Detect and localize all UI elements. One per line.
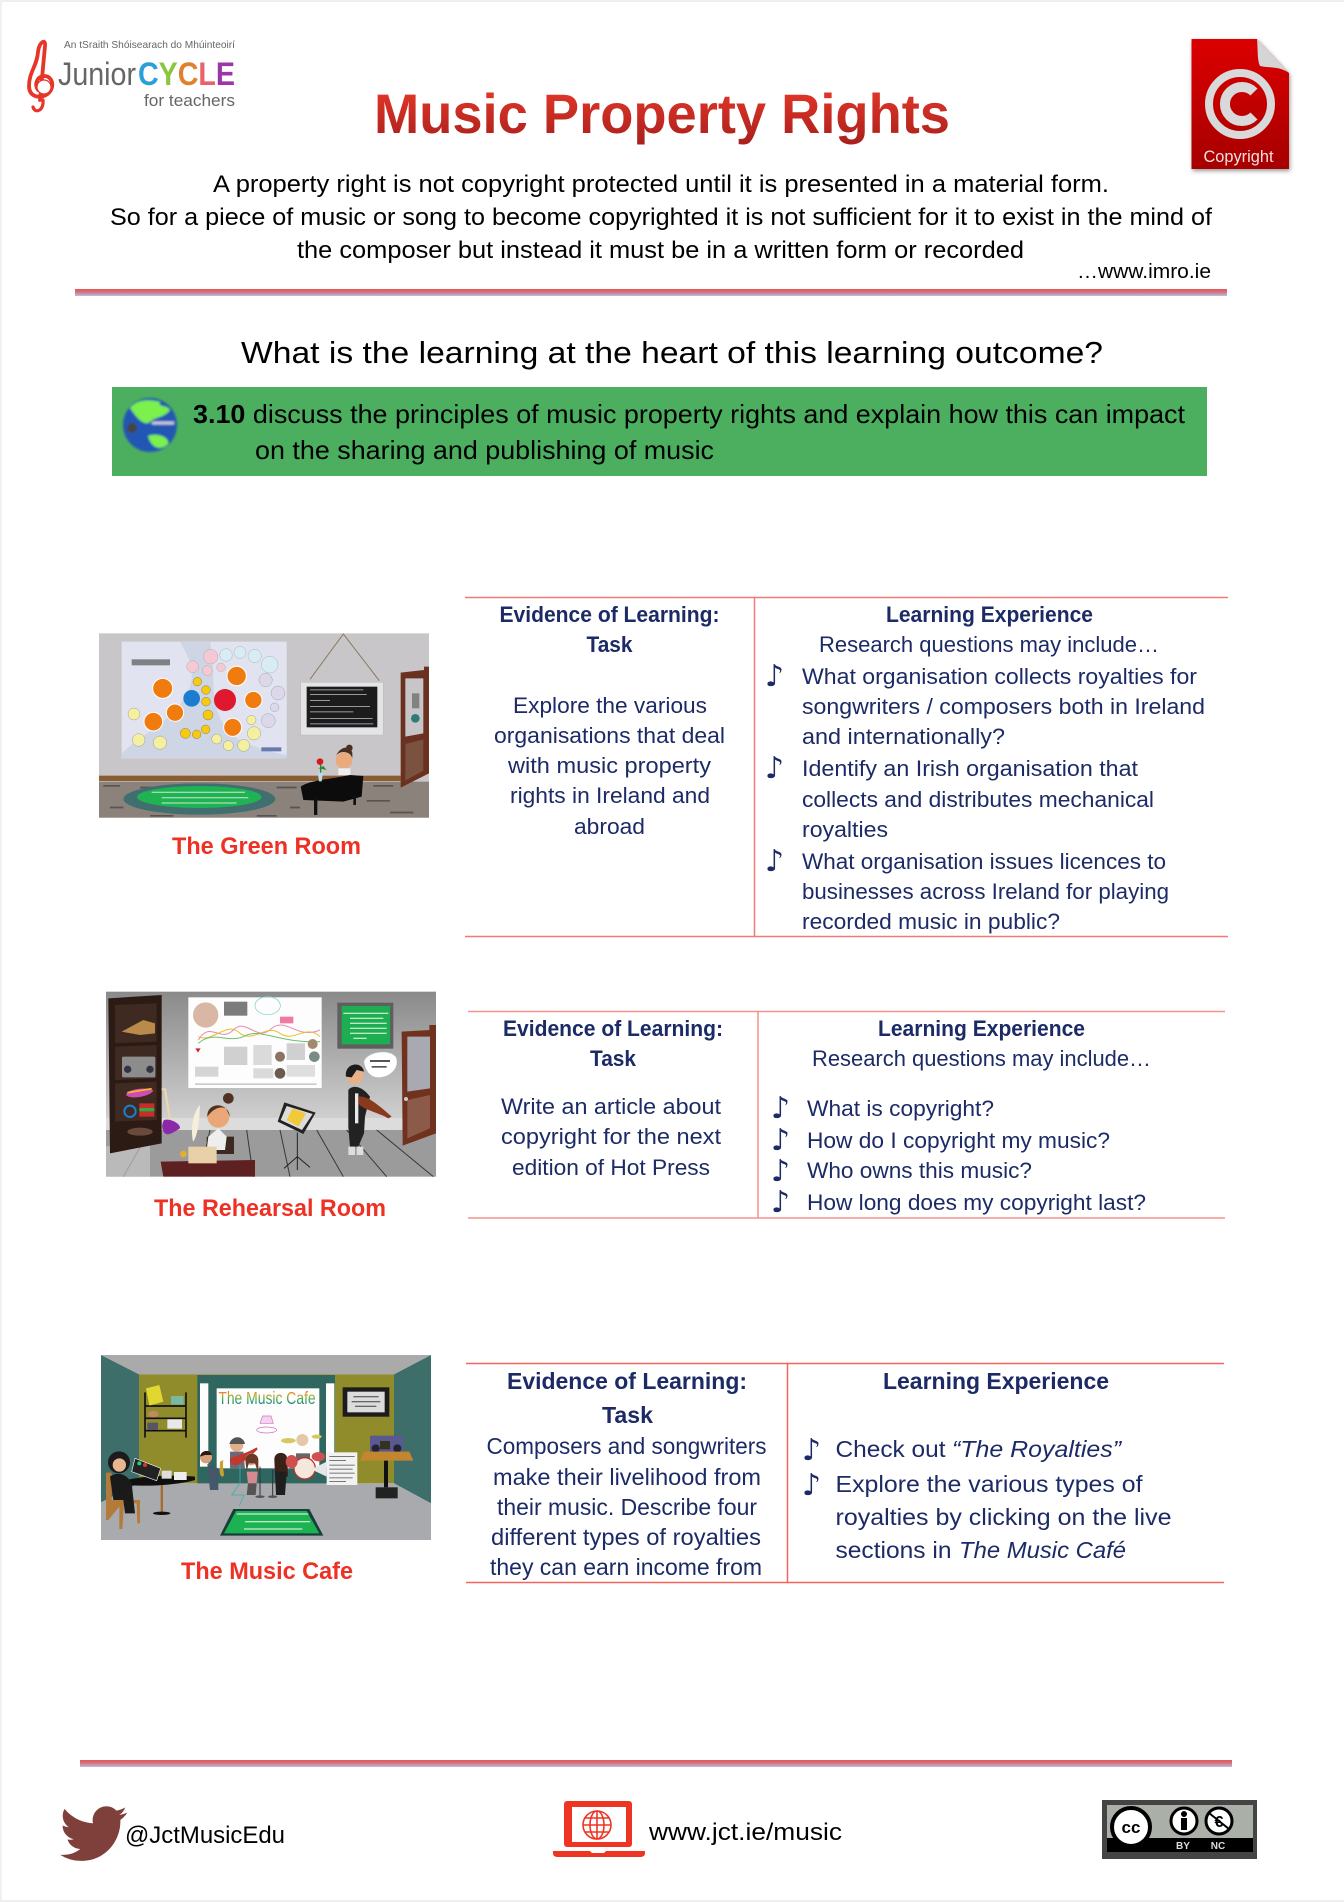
rug: [123, 783, 275, 815]
logo: Junior Cycle for Teachers: [29, 39, 235, 111]
icon: globe: [123, 398, 177, 452]
chalkboard: [301, 634, 383, 735]
caption: The Green Room: The Green Room: [172, 833, 361, 860]
column: learning experience: Learning Experience: [878, 1016, 1085, 1041]
icon: copyright document: [1192, 39, 1289, 169]
column: learning experience: songwriters / composers both in Ireland: [802, 694, 1205, 719]
panel: learning outcome banner: on the sharing and publishing of music: [255, 435, 714, 465]
callout note: [311, 1452, 357, 1485]
icon: creative commons BY-NC badge: cc: [1122, 1818, 1140, 1837]
column: evidence of learning: Evidence of Learning:: [500, 602, 720, 627]
logo: Junior Cycle for Teachers: for teachers: [144, 92, 235, 110]
column: learning experience: What organisation collects royalties for: [802, 664, 1197, 689]
column: learning experience: recorded music in public?: [802, 909, 1060, 934]
shelf: [145, 1385, 186, 1438]
panel: learning outcome banner: [112, 387, 1207, 476]
image: The Green Room scene: [99, 633, 429, 818]
band: [200, 1434, 325, 1506]
column: evidence of learning: make their livelihood from: [493, 1464, 761, 1490]
image: The Music Cafe scene: [101, 1355, 431, 1540]
column: evidence of learning: Task: [590, 1046, 637, 1071]
column: evidence of learning: Evidence of Learning:: [507, 1368, 747, 1394]
column: learning experience: royalties by clicking on the live: [836, 1504, 1172, 1530]
column: learning experience: ♪: [802, 1433, 821, 1468]
intro text block: A property right is not copyright protected until it is presented in a material form.: [213, 171, 1109, 198]
column: learning experience: [802, 1368, 1172, 1563]
guitar: [162, 1089, 180, 1134]
column: learning experience: businesses across Ireland for playing: [802, 879, 1169, 904]
column: evidence of learning: with music property: [507, 753, 711, 778]
footer: website: www.jct.ie/music: [648, 1819, 842, 1846]
column: evidence of learning: Evidence of Learning:: [503, 1016, 723, 1041]
icon: treble clef: [29, 42, 52, 111]
column: evidence of learning: [486, 1368, 766, 1580]
piano and player: [301, 745, 363, 815]
column: learning experience: How long does my copyright last?: [807, 1190, 1146, 1215]
column: learning experience: ♪: [771, 1091, 790, 1126]
sound desk and technician: [106, 1451, 195, 1529]
column: learning experience: Explore the various types of: [836, 1471, 1143, 1497]
boombox on table: [360, 1436, 413, 1498]
caption: The Music Cafe: The Music Cafe: [181, 1558, 353, 1585]
intro text block: [110, 171, 1212, 283]
column: evidence of learning: Task: [602, 1402, 653, 1428]
violinist: [346, 1052, 397, 1155]
cafe logo: [257, 1416, 277, 1433]
music stand: [278, 1102, 316, 1170]
column: learning experience: [771, 1016, 1151, 1220]
column: learning experience: collects and distributes mechanical: [802, 787, 1154, 812]
icon: twitter bird: [60, 1806, 127, 1861]
footer: twitter handle: @JctMusicEdu: [125, 1822, 285, 1849]
column: learning experience: and internationally?: [802, 724, 1005, 749]
panel: learning outcome banner: 3.10 discuss the principles of music property rights and explain how this can impact: [193, 399, 1186, 429]
intro text block: So for a piece of music or song to become copyrighted it is not sufficient for it to exist in the mind of: [110, 204, 1212, 231]
column: learning experience: [765, 602, 1205, 934]
column: learning experience: sections in: [836, 1537, 952, 1563]
column: learning experience: ♪: [765, 751, 784, 786]
icon: creative commons BY-NC badge: BY: [1176, 1841, 1190, 1852]
title: Music Property Rights: [374, 82, 950, 145]
icon: creative commons BY-NC badge: [1102, 1800, 1257, 1859]
column: learning experience: “The Royalties”: [952, 1436, 1122, 1462]
column: evidence of learning: organisations that deal: [494, 723, 725, 748]
column: evidence of learning: edition of Hot Press: [512, 1155, 710, 1180]
column: evidence of learning: Write an article about: [501, 1094, 721, 1119]
panel: Music Cafe table: [466, 1363, 1224, 1583]
column: learning experience: ♪: [765, 659, 784, 694]
column: evidence of learning: [501, 1016, 723, 1180]
icon: laptop with globe: [553, 1801, 645, 1857]
column: learning experience: Who owns this music?: [807, 1158, 1032, 1183]
column: evidence of learning: they can earn income from: [490, 1554, 762, 1580]
column: learning experience: The Music Café: [959, 1537, 1126, 1563]
column: learning experience: What is copyright?: [807, 1096, 994, 1121]
column: learning experience: What organisation issues licences to: [802, 849, 1166, 874]
column: learning experience: royalties: [802, 817, 888, 842]
column: evidence of learning: different types of royalties: [491, 1524, 761, 1550]
column: learning experience: ♪: [771, 1123, 790, 1158]
column: learning experience: ♪: [765, 844, 784, 879]
image: The Rehearsal Room scene: [106, 992, 436, 1177]
column: evidence of learning: Explore the various: [513, 693, 707, 718]
door: [402, 1025, 436, 1146]
door: [401, 667, 429, 788]
column: learning experience: Research questions may include…: [812, 1046, 1151, 1071]
column: learning experience: Identify an Irish organisation that: [802, 756, 1138, 781]
column: evidence of learning: Task: [586, 632, 633, 657]
green screen: [337, 1003, 393, 1049]
column: evidence of learning: [494, 602, 725, 839]
icon: creative commons BY-NC badge: NC: [1211, 1841, 1225, 1852]
logo: Junior Cycle for Teachers: CYCLE: [138, 56, 235, 92]
column: learning experience: Check out: [836, 1436, 946, 1462]
poster: [188, 997, 322, 1088]
icon: creative commons BY-NC badge: €: [1215, 1814, 1224, 1831]
logo: Junior Cycle for Teachers: Junior: [58, 56, 136, 92]
panel: Rehearsal Room table: [468, 1011, 1225, 1220]
column: learning experience: ♪: [771, 1154, 790, 1189]
icon: copyright document: Copyright: [1204, 147, 1274, 166]
column: learning experience: ♪: [802, 1468, 821, 1503]
intro text block: the composer but instead it must be in a written form or recorded: [297, 237, 1024, 264]
column: learning experience: Research questions may include…: [819, 632, 1159, 657]
column: learning experience: Learning Experience: [886, 602, 1093, 627]
column: evidence of learning: Composers and songwriters: [486, 1433, 766, 1459]
column: evidence of learning: rights in Ireland and: [510, 783, 710, 808]
column: evidence of learning: their music. Describe four: [497, 1494, 757, 1520]
bookcase: [108, 995, 162, 1153]
green floor mat: [220, 1509, 323, 1536]
intro text block: …www.imro.ie: [1077, 260, 1211, 283]
caption: The Rehearsal Room: The Rehearsal Room: [154, 1195, 386, 1222]
column: learning experience: How do I copyright my music?: [807, 1128, 1110, 1153]
column: evidence of learning: copyright for the next: [501, 1124, 721, 1149]
column: learning experience: Learning Experience: [883, 1368, 1109, 1394]
column: learning experience: ♪: [771, 1185, 790, 1220]
column: evidence of learning: abroad: [574, 814, 645, 839]
heading: learning question: What is the learning at the heart of this learning outcome?: [241, 335, 1103, 370]
panel: Green Room table: [465, 597, 1228, 937]
teacher at desk: [161, 1093, 255, 1177]
cafe sign text: The Music Cafe: [218, 1388, 316, 1408]
framed notice: [343, 1387, 389, 1417]
logo: Junior Cycle for Teachers: An tSraith Shóisearach do Mhúinteoirí: [64, 39, 235, 51]
